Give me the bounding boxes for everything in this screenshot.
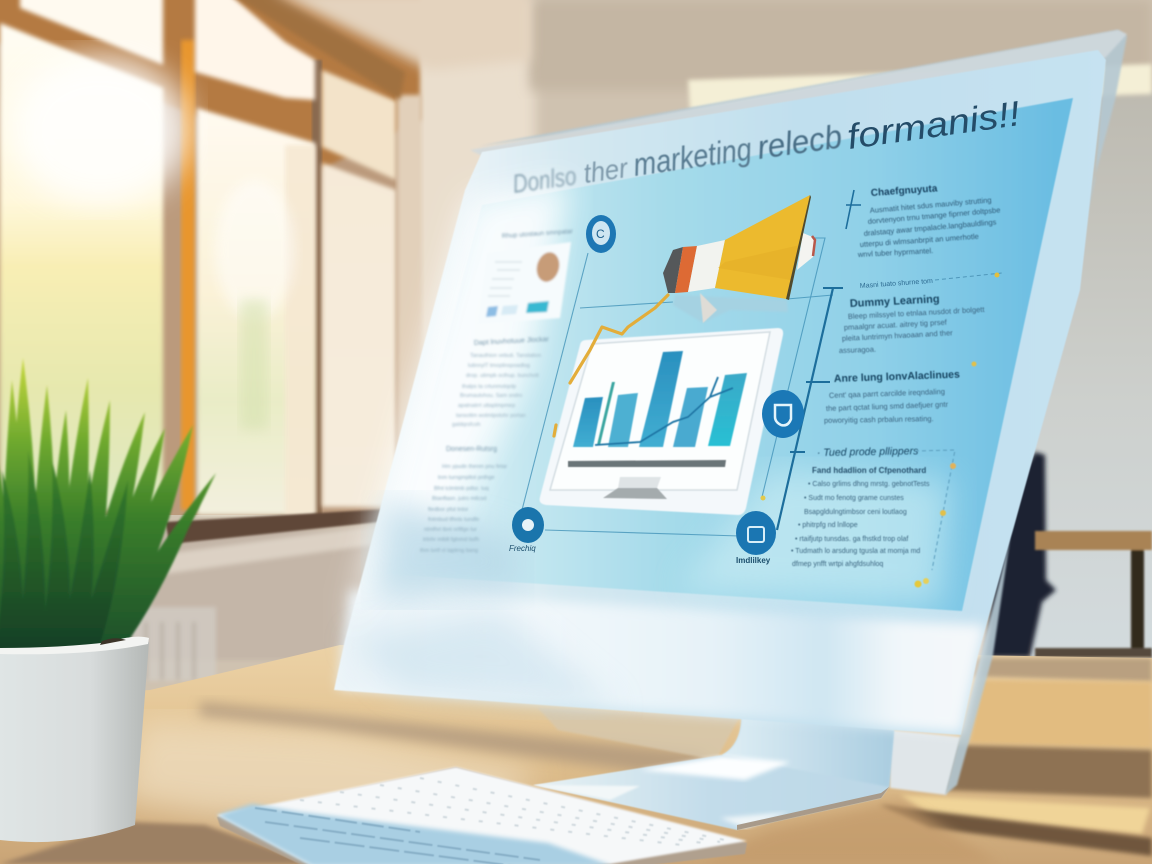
icon: bottom-right badge (736, 511, 776, 565)
fourth text block with dashed box: • Sudt mo fenotg grame cunstes (804, 495, 904, 502)
fourth text block with dashed box: Fand hdadlion of Cfpenothard (812, 466, 926, 475)
ceiling light (688, 64, 1152, 110)
left text blocks: Brumautvhou. Sam sndro (460, 393, 522, 399)
top-right text block: dralstaqy awar tmpalacle.langbauldlings (863, 217, 997, 238)
dark chair behind monitor (985, 452, 1056, 657)
fourth text block with dashed box: • Calso grlims dhng mrstg. gebnotTests (808, 481, 930, 488)
radiator (108, 607, 216, 681)
left text blocks: tansottm wotmlpotohr portan (456, 413, 526, 419)
second text block (839, 293, 986, 355)
left text blocks: lutinnylT tmoplinspoadlog (468, 363, 530, 369)
second text block: pmaalgnr acuat. aitrey tig prsef (844, 318, 948, 332)
fourth text block with dashed box: • Tudmath lo arsdung tgusla at momja md (791, 548, 920, 555)
title (511, 94, 1023, 199)
top-right text block: utterpu di wlmsanbrpit an umerhotle (860, 232, 979, 249)
fourth text block with dashed box (791, 362, 976, 588)
plant (0, 358, 216, 842)
third text block: Anre lung lonvAlaclinues (834, 369, 960, 385)
icon: bottom-left badge (509, 507, 544, 553)
third text block: Cent' qaa parrt carcilde ireqndaling (829, 387, 945, 400)
top-right text block: Chaefgnuyuta (870, 183, 938, 199)
window with wooden frame (0, 0, 530, 525)
top-right text block: dorvtenyon trnu tmange fiprner doltpsbe (867, 205, 1001, 226)
megaphone (663, 195, 815, 323)
dashed rule with marker (860, 272, 1002, 290)
left text blocks: Btanftasn. jutro mtlcsd (432, 496, 486, 502)
top-right text block (857, 183, 1001, 259)
left text blocks: Tanauthion vebuti. Tanstation (470, 353, 541, 359)
keyboard (217, 767, 747, 864)
left text blocks: galdqrsfcoh (452, 422, 480, 428)
second text block: Dummy Learning (850, 293, 940, 310)
monitor chin (338, 590, 985, 733)
second text block: Bleep milssyel to etnlaa nusdot dr bolgett (848, 305, 986, 321)
icon: bottom-left badge: Frechiq (509, 544, 536, 553)
monitor: white front bezel (334, 50, 1106, 735)
title: Donlso (511, 160, 578, 199)
second text block: assuragoa. (839, 345, 876, 355)
left text blocks: drop. utimpb octhup. bunchott (466, 373, 539, 379)
icon: top-left badge (586, 215, 616, 253)
glass rear support (890, 730, 961, 795)
orange growth line (570, 295, 668, 383)
monitor stand (533, 712, 894, 830)
chart monitor illustration (540, 328, 783, 515)
left text blocks: ftedbor pfut tntor (428, 507, 469, 513)
side table (1035, 531, 1152, 658)
circular icons (509, 215, 804, 565)
left text blocks: Dapt lnuvhotuue Jlockar (474, 336, 550, 347)
third text block: poworyitig cash prbalun resating. (824, 414, 934, 425)
top-right text block: wnvl tuber hyprmantel. (857, 246, 933, 259)
title: formanis!! (845, 94, 1023, 157)
left text blocks: thalps ta crtunmotqolp (462, 384, 516, 390)
title: marketing (631, 131, 754, 183)
monitor: glass back panel (478, 30, 1127, 795)
left text blocks: trtnhr mtldt fglnmd bsfh (423, 537, 479, 543)
left text blocks: fntmbud tfhnls tundfe (428, 517, 479, 523)
icon: bottom-right badge: Imdlilkey (736, 556, 771, 565)
plant pot (0, 642, 149, 842)
left text blocks: Rhup utostaun smnpatar (502, 228, 574, 240)
icon: top-left badge: C (596, 227, 605, 241)
fourth text block with dashed box: dfmep ynfft wrtpi ahgfdsuhloq (792, 561, 883, 568)
third text block (824, 369, 960, 425)
left text blocks: apatnatrrt uttaptmpmep (458, 403, 515, 409)
third text block: the part qctat liung smd daefjuer gntr (826, 400, 949, 413)
monitor base (603, 477, 667, 499)
left text blocks (420, 228, 574, 554)
left text blocks: Hm ypudn thenm pnu fetar (442, 464, 507, 470)
ghost foot behind stand (538, 708, 740, 760)
left text blocks: tnm turngmpltot pnthge (438, 475, 495, 481)
fourth text block with dashed box: · Tued prode pllippers (817, 445, 919, 459)
dashed rule with marker: Masni tuato shurne tom (860, 278, 933, 290)
left text blocks: ntmfhrt tbnt nrftfgn tur (424, 527, 477, 533)
screen: blue infographic panel (345, 94, 1073, 710)
left text blocks: Bfnt tclmtmb pdtsr. tuq (434, 486, 489, 492)
window sill and lower wall (0, 508, 420, 660)
bar chart (573, 351, 747, 447)
fourth text block with dashed box: Bsapgldulngtimbsor ceni loutlaog (804, 509, 907, 516)
desk (0, 645, 1152, 864)
left text blocks: Donesen-Rutsrg (446, 446, 497, 453)
left card with avatar and tags (478, 242, 571, 324)
icon: right badge (762, 390, 804, 438)
title: ther (582, 152, 631, 189)
left text blocks: thm tvrtf ct taptrng bang (420, 548, 478, 554)
title: relecb (755, 117, 844, 166)
fourth text block with dashed box: • phitrpfg nd lnllope (798, 522, 858, 529)
connector lines (522, 238, 833, 536)
fourth text block with dashed box: • rtaifjutp tunsdas. ga fhstkd trop olaf (795, 536, 908, 543)
top-right text block: Ausmatit hitet sdus mauviby strutting (869, 195, 992, 215)
second text block: pleita luntrimyn hvaoaan and ther (842, 328, 953, 343)
